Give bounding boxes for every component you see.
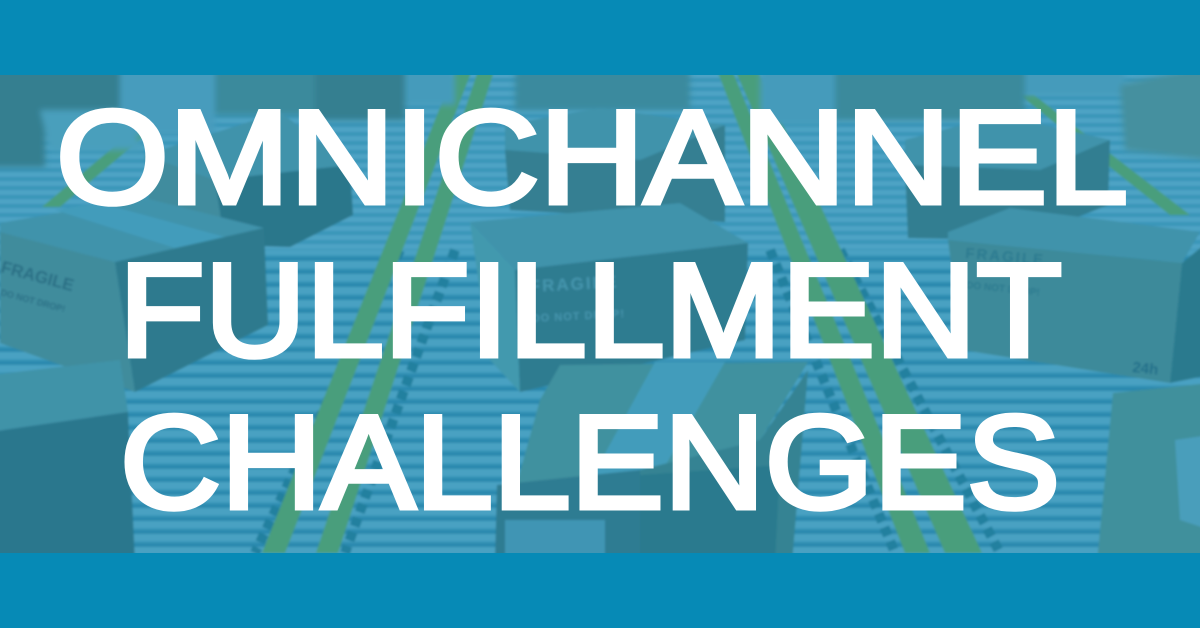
title line 2: FULFILLMENT	[119, 237, 1062, 385]
box: upper centre	[505, 108, 725, 222]
box: large left	[0, 198, 268, 392]
box label: fragile: FRAGILE	[965, 245, 1046, 269]
conveyor chains	[255, 250, 1000, 553]
box label: do not drop: DO NOT DROP!	[966, 280, 1040, 299]
box: right	[948, 208, 1200, 383]
title line 1: OMNICHANNEL	[56, 84, 1128, 232]
conveyor rollers	[0, 65, 1200, 563]
box label: fragile: FRAGILE	[529, 272, 619, 296]
box label: 24h: 24h	[1132, 359, 1159, 379]
title	[56, 84, 1128, 537]
box label: fragile: FRAGILE	[0, 258, 76, 295]
top banner bar	[0, 0, 1200, 75]
box label: do not drop: DO NOT DROP!	[0, 287, 66, 314]
box label: do not drop: DO NOT DROP!	[532, 308, 625, 325]
box: lower left	[0, 360, 135, 563]
background boxes	[0, 65, 1200, 167]
box: upper right	[905, 115, 1110, 240]
bottom banner bar	[0, 553, 1200, 628]
box: lower centre	[495, 362, 808, 563]
box: centre	[470, 203, 748, 392]
green belts	[42, 65, 1190, 553]
photo: conveyor with cardboard boxes	[0, 75, 1200, 553]
box: lower right	[1097, 383, 1200, 563]
title line 3: CHALLENGES	[120, 389, 1060, 537]
box: upper left	[145, 112, 353, 247]
